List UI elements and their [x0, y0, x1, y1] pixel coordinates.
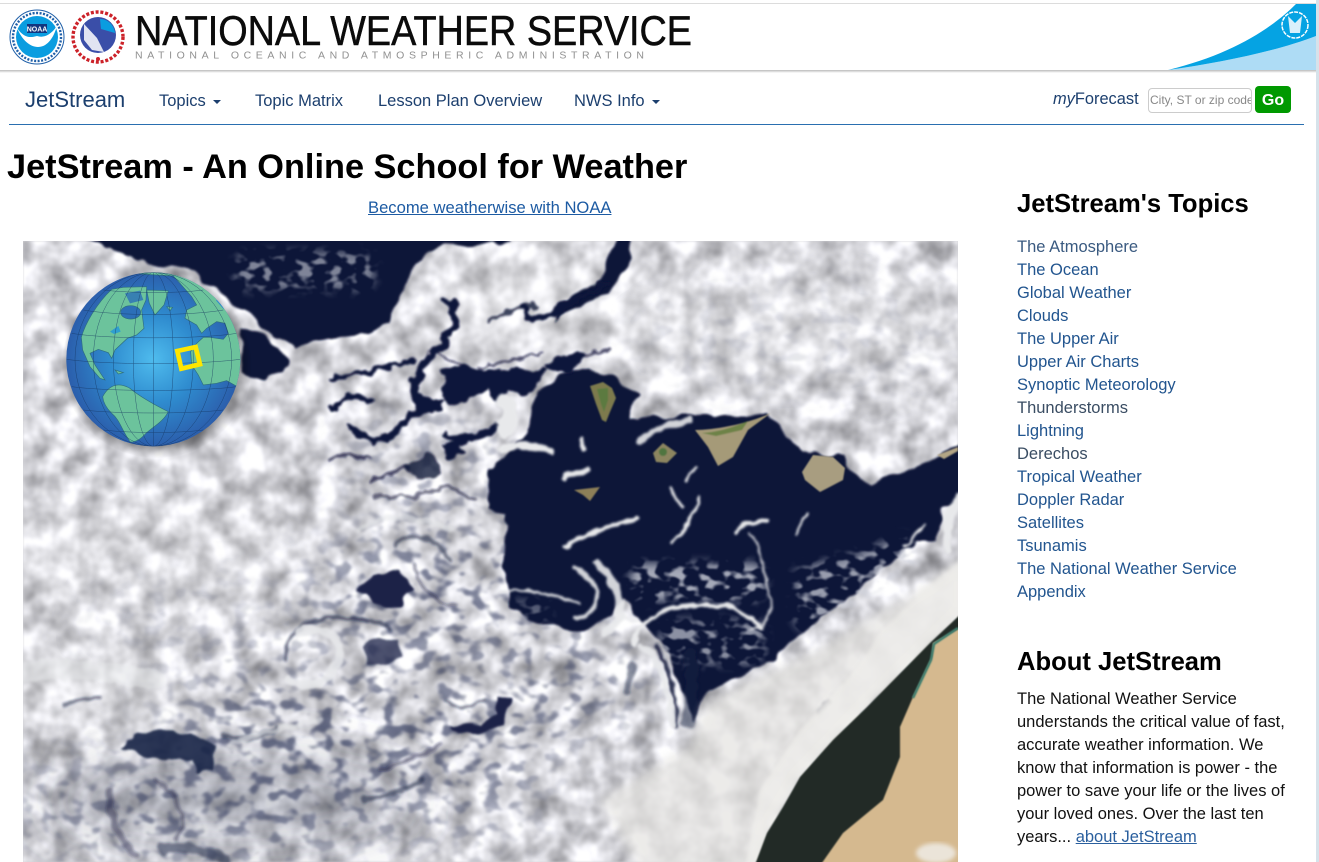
about text: accurate weather information. We — [1017, 736, 1263, 754]
sidebar topic list — [66, 238, 1237, 601]
icon: NOAA logo — [10, 10, 64, 64]
sidebar topic list: Satellites — [1017, 514, 1084, 532]
subtitle: NOAA: NATIONAL OCEANIC AND ATMOSPHERIC ADMINISTRATION — [135, 50, 644, 62]
sidebar topic list: Lightning — [1017, 422, 1084, 440]
sidebar topic list: The Upper Air — [1017, 330, 1119, 348]
cloud cracks in the broken cumulus — [330, 283, 610, 500]
about text — [1017, 690, 1285, 846]
sidebar topic list: Global Weather — [1017, 284, 1131, 302]
icon: NWS logo — [71, 10, 125, 64]
sidebar topic list: Synoptic Meteorology — [1017, 376, 1176, 394]
Canary Islands — [574, 382, 958, 501]
page right edge strip — [1316, 0, 1319, 862]
nav divider — [9, 124, 1304, 125]
about text: your loved ones. Over the last ten — [1017, 805, 1264, 823]
sidebar topic list: Tropical Weather — [1017, 468, 1142, 486]
land masses — [81, 271, 243, 442]
sidebar topic list: Tsunamis — [1017, 537, 1087, 555]
forecast input: City, ST or zip code — [1150, 93, 1252, 107]
sidebar topic list: Upper Air Charts — [1017, 353, 1139, 371]
go button: Go — [1262, 92, 1284, 109]
sidebar topic list: Clouds — [1017, 307, 1068, 325]
header banner — [0, 3, 1316, 72]
icon: NOAA logo: NOAA — [27, 26, 47, 34]
satellite image with globe inset — [23, 241, 958, 862]
globe inset — [62, 271, 252, 458]
nav: NWS Info: NWS Info — [574, 92, 645, 110]
nav: Topics: Topics — [159, 92, 206, 110]
lace of fine cloud over the dark sea — [230, 245, 916, 671]
header corner swoosh — [1168, 4, 1316, 70]
graticule — [67, 272, 240, 446]
nav: Topic Matrix: Topic Matrix — [255, 92, 343, 110]
myForecast label: myForecast — [1053, 90, 1139, 108]
go button — [1255, 86, 1291, 113]
sidebar topic list: The Ocean — [1017, 261, 1099, 279]
sidebar heading: topics: JetStream's Topics — [1017, 190, 1249, 218]
sidebar topic list: Appendix — [1017, 583, 1086, 601]
dark ocean areas — [76, 235, 965, 722]
nav brand: JetStream — [25, 87, 125, 112]
title: National Weather Service: NATIONAL WEATHER SERVICE — [135, 7, 692, 54]
lower-right cloud bank — [600, 557, 965, 862]
sidebar topic list: Derechos — [1017, 445, 1088, 463]
white cloud streaks and vortex rims — [25, 400, 958, 745]
sidebar topic list: The Atmosphere — [1017, 238, 1138, 256]
coastal sea strip — [753, 610, 965, 862]
about text: understands the critical value of fast, — [1017, 713, 1285, 731]
cloud field — [0, 241, 980, 862]
about text: years... about JetStream — [1017, 828, 1197, 846]
subtitle link: Become weatherwise with NOAA — [368, 198, 611, 217]
nav: Lesson Plan Overview: Lesson Plan Overview — [378, 92, 542, 110]
dark swirl lanes — [63, 537, 830, 860]
sidebar topic list: Doppler Radar — [1017, 491, 1124, 509]
about text: know that information is power - the — [1017, 759, 1277, 777]
dark patches in the vortex field — [120, 570, 510, 775]
forecast input — [1148, 88, 1252, 113]
sidebar topic list: Thunderstorms — [1017, 399, 1128, 417]
page title: JetStream - An Online School for Weather — [7, 148, 687, 186]
about text: power to save your life or the lives of — [1017, 782, 1285, 800]
locator square — [177, 347, 200, 369]
about text: The National Weather Service — [1017, 690, 1237, 708]
sidebar topic list: The National Weather Service — [1017, 560, 1237, 578]
Sahara desert coast — [817, 625, 965, 862]
sidebar heading: about: About JetStream — [1017, 648, 1222, 676]
